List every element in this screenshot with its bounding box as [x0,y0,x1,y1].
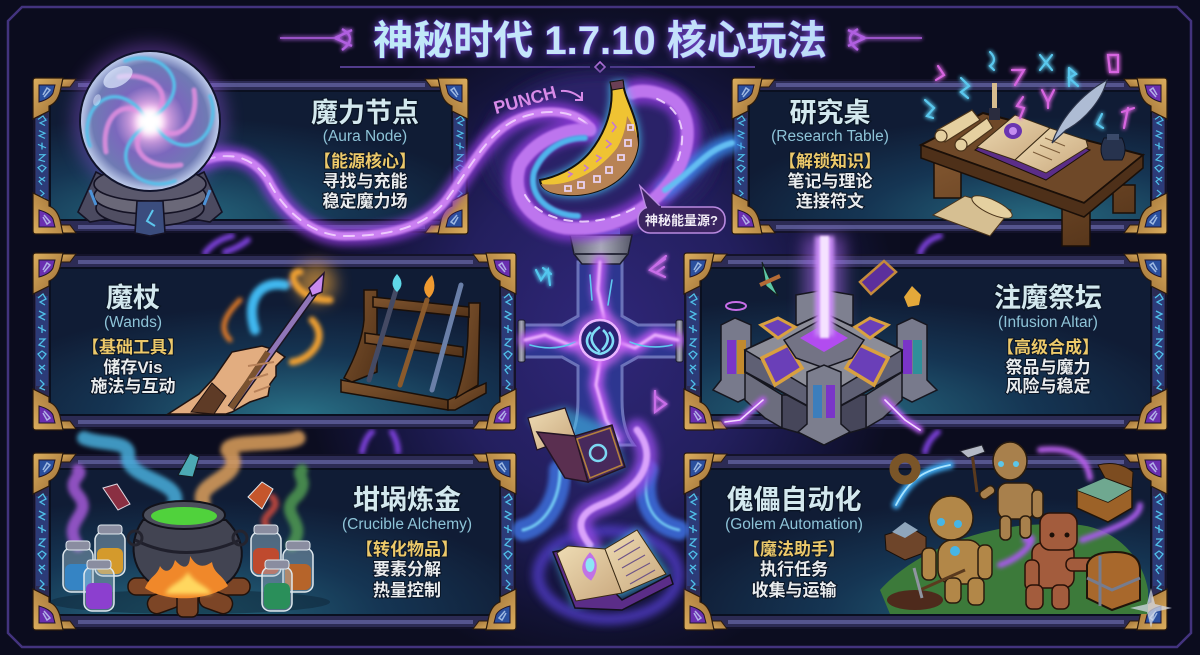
text: wands: 魔杖 [106,283,160,313]
crate [885,527,926,560]
text: aura node [311,98,419,211]
text: research table: 连接符文 [796,191,864,211]
panel: aura node [33,78,468,234]
chest top [1077,464,1133,522]
text: golem automation: 傀儡自动化 [726,485,862,515]
central purple haze [300,0,900,655]
stream tubes and sparks lower centre [523,430,679,619]
text: golem automation: 【魔法助手】 [743,539,845,559]
feather [1052,80,1107,143]
floating items [103,453,273,510]
icon: open spell book [553,527,673,610]
core ring [573,313,627,367]
illustration: hand with wand and glows [168,263,336,414]
text: wands: (Wands) [104,314,162,331]
illustration: golems, chests and grass [880,442,1172,628]
chest right [1087,552,1140,610]
open book [975,115,1090,180]
golem with hammer [978,442,1043,540]
gear [894,458,916,480]
purple haze behind banana [485,72,715,228]
lightning [525,262,678,440]
energy streams from orb around banana [205,91,732,236]
icon: banana [540,80,638,195]
text: wands: 施法与互动 [90,377,176,396]
main body [745,313,902,415]
text: wands [82,283,184,396]
text: golem automation: 执行任务 [760,560,828,579]
base lightning [725,400,920,430]
smoke [73,438,303,546]
icon: closed spell book [528,407,625,482]
floating runes [536,256,666,412]
text: research table: 【解锁知识】 [779,152,881,171]
top dais [784,318,864,368]
beam [815,236,834,336]
base [78,167,222,236]
icon: crystal orb [72,43,228,236]
central conduit: pipes and core [518,228,683,445]
floating items [726,261,921,310]
blue arc [896,449,1140,565]
lower scroll [933,196,1011,236]
panel: infusion altar [684,253,1167,430]
text: infusion altar: 风险与稳定 [1006,376,1090,396]
front pillar [798,365,850,445]
callout: energy source: 神秘能量源? [645,213,718,228]
illustration: research table with book and quill [921,52,1143,246]
text: crucible alchemy: (Crucible Alchemy) [342,516,472,533]
text: golem automation: (Golem Automation) [725,516,863,533]
text: infusion altar: 【高级合成】 [997,337,1099,357]
title: 神秘时代 1.7.10 核心玩法 [373,19,827,63]
title ornament left [280,29,352,50]
flanges [518,320,683,362]
side pillars [713,318,937,402]
label: punch: PUNCH [491,82,559,118]
clay golem [1025,513,1098,609]
lower arches [745,372,902,440]
text: aura node: 寻找与充能 [322,171,408,191]
jars [63,541,93,592]
text: crucible alchemy [342,485,472,600]
floating runes [925,52,1134,128]
fire [145,556,228,598]
text: infusion altar: 注魔祭坛 [994,283,1102,313]
text: research table: 研究桌 [790,98,870,128]
text: research table: 笔记与理论 [788,171,872,191]
panel: research table [732,78,1167,234]
text: crucible alchemy: 坩埚炼金 [353,485,461,515]
text: golem automation: 收集与运输 [752,580,836,600]
text: infusion altar: 祭品与魔力 [1006,357,1090,377]
text: wands: 储存Vis [103,357,163,377]
text: research table: (Research Table) [771,128,889,145]
text: aura node: 魔力节点 [311,98,419,128]
text: infusion altar [994,283,1102,396]
text: aura node: 稳定魔力场 [322,191,408,211]
illustration: crucible, jars and smoke [50,438,330,617]
scrolls [935,110,993,151]
ink and candle [989,83,1125,160]
pipes [520,262,680,445]
text: research table [771,98,889,211]
title ornament right [848,29,922,50]
illustration: wand rack [341,274,486,410]
panel: crucible alchemy [33,453,516,630]
decorative star mark [1130,588,1172,628]
text: wands: 【基础工具】 [82,338,184,357]
text: infusion altar: (Infusion Altar) [998,314,1098,331]
illustration: infusion altar [713,236,937,445]
brass golem [922,496,992,605]
panel: wands [33,253,516,430]
text: aura node: 【能源核心】 [314,151,416,171]
text: crucible alchemy: 热量控制 [373,580,441,600]
logs [128,578,250,617]
panel: golem automation [684,453,1167,630]
pot [134,520,242,592]
text: crucible alchemy: 【转化物品】 [356,539,458,559]
gap glow patches [205,236,940,452]
text: aura node: (Aura Node) [323,128,407,145]
top cap [570,228,632,264]
title underline [340,62,755,72]
back pillars [796,290,853,325]
text: crucible alchemy: 要素分解 [373,560,441,579]
text: golem automation [725,485,863,600]
title: 神秘时代 1.7.10 核心玩法 [373,19,827,63]
callout: energy source [638,186,725,233]
